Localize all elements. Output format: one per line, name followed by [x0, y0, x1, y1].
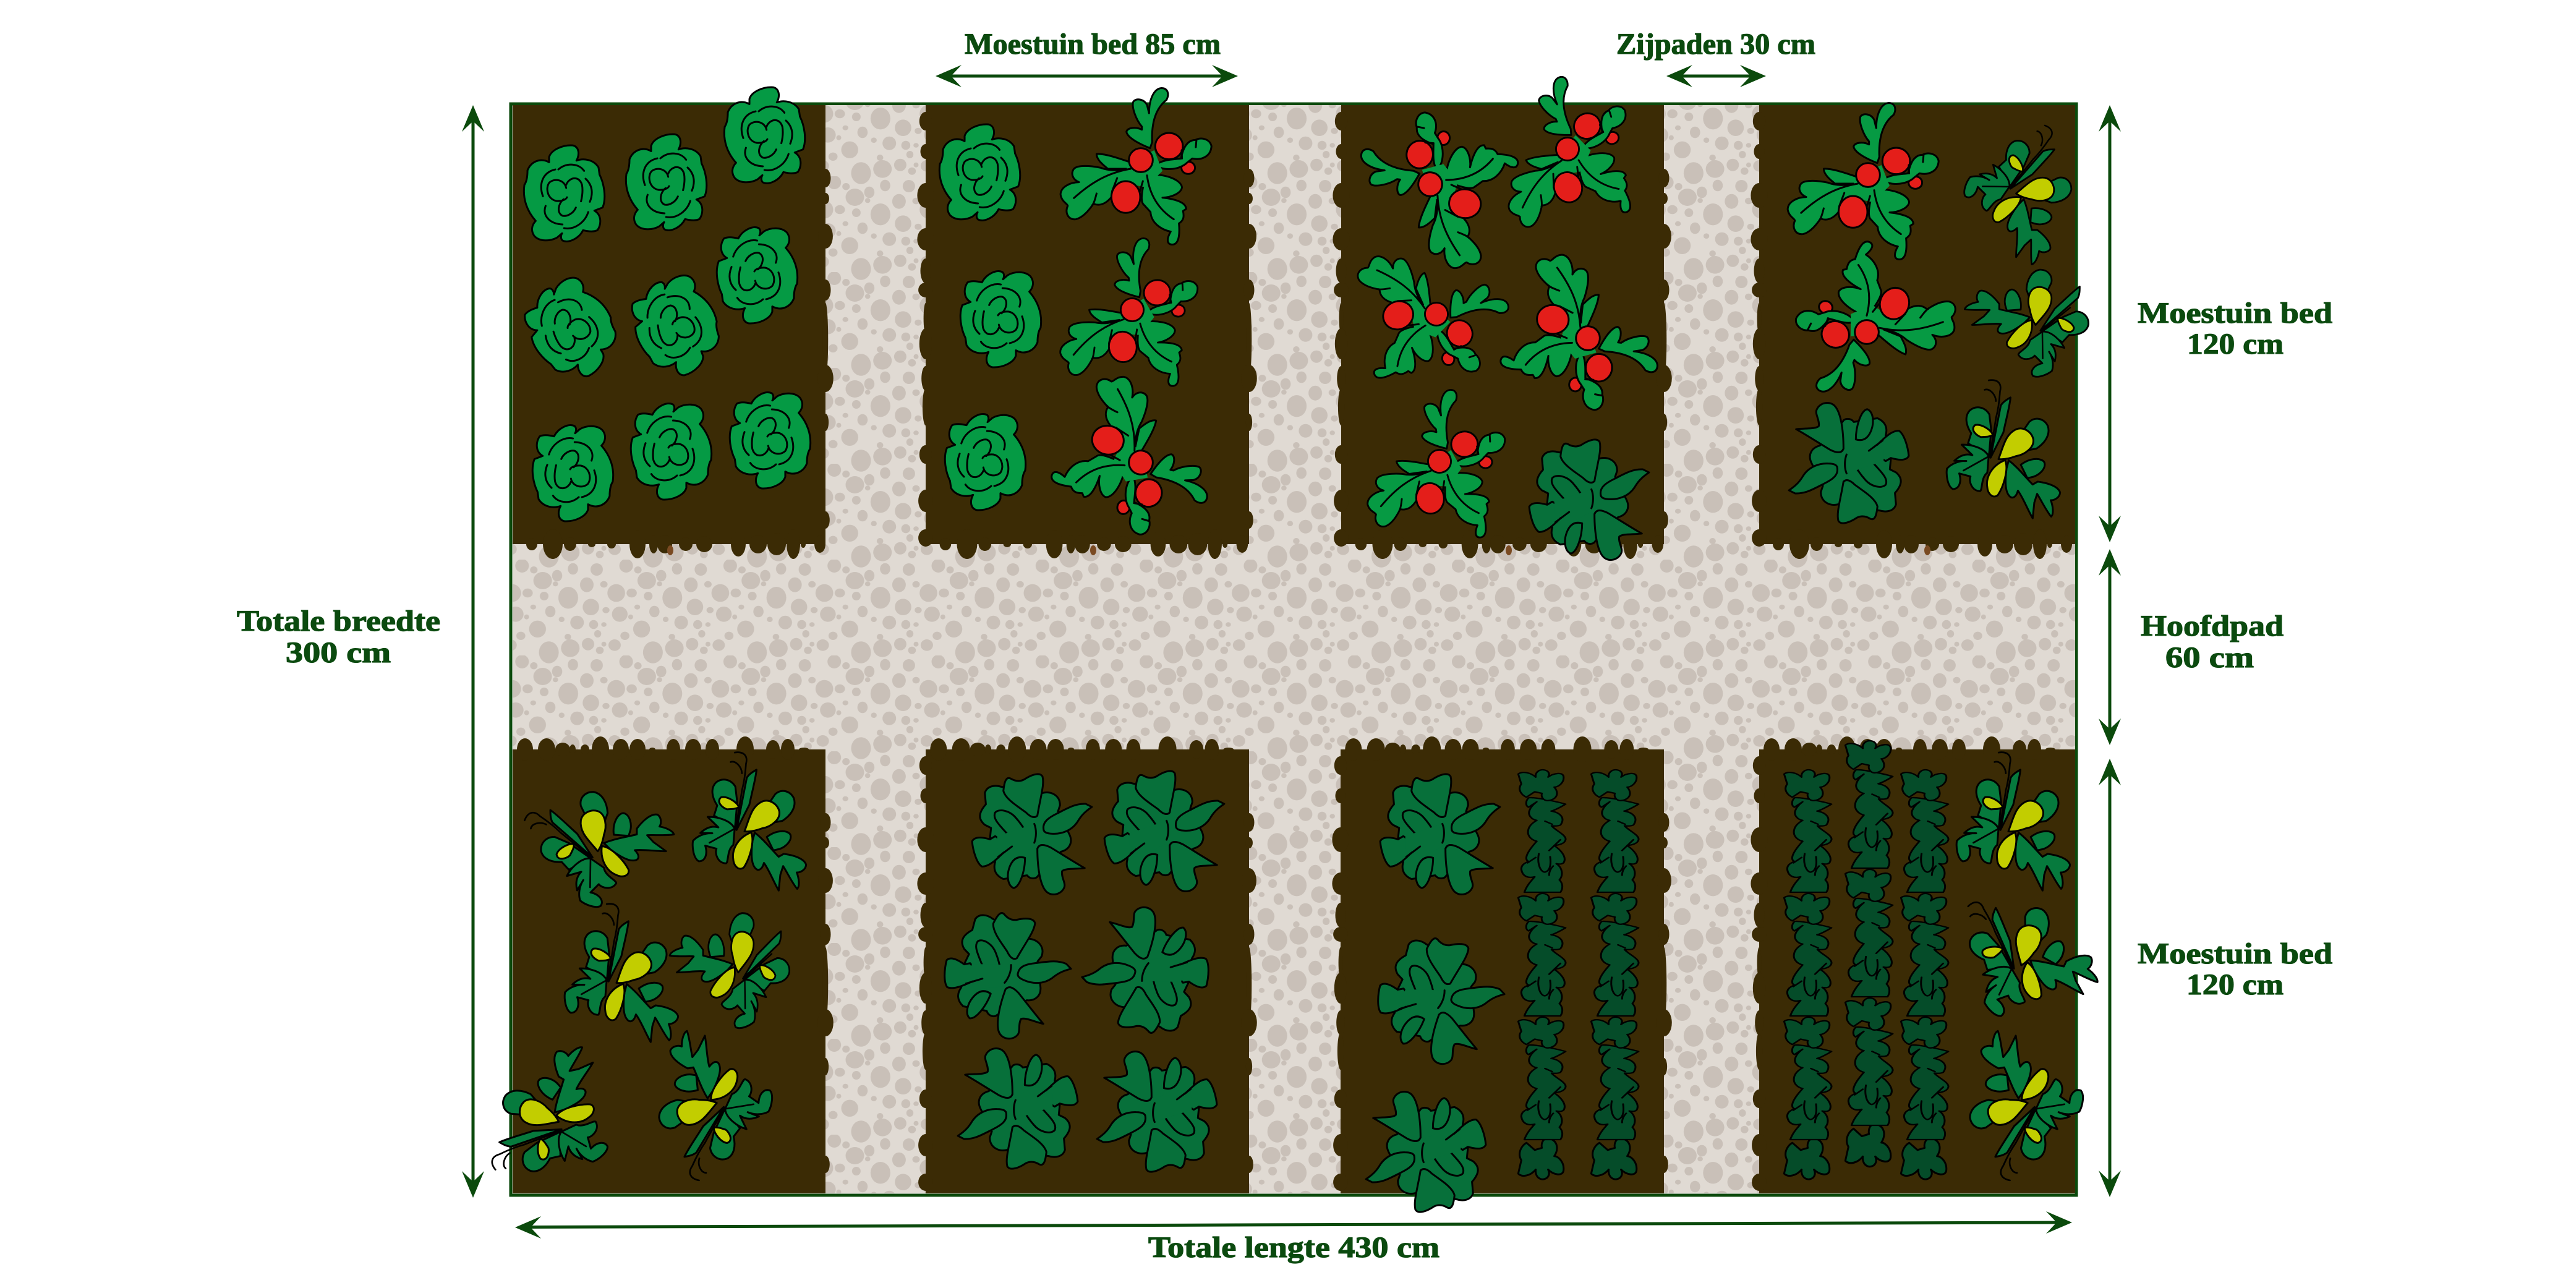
arrow: main path — [2099, 549, 2121, 745]
lettuce plant — [945, 414, 1026, 510]
label: main path: 60 cm — [2165, 641, 2254, 674]
dark leafy plant — [1529, 440, 1649, 560]
panel: bed bottom 1, squash — [471, 736, 834, 1213]
label: total width: 300 cm — [286, 636, 391, 669]
tomato plant — [1774, 228, 1973, 429]
label: total width: Totale breedte — [237, 605, 440, 638]
dark leafy plant — [958, 1049, 1078, 1169]
squash plant — [1964, 270, 2089, 377]
label: top bed height: 120 cm — [2187, 328, 2284, 360]
arrow: top bed height — [2099, 105, 2121, 542]
dark leafy plant — [1380, 774, 1500, 894]
label: top bed height: Moestuin bed — [2138, 297, 2332, 330]
squash plant — [1956, 1018, 2095, 1185]
plant row — [1518, 770, 1566, 1179]
arrow: bottom bed height — [2099, 759, 2121, 1197]
panel: bed top 3, tomato and kale — [1331, 59, 1672, 560]
gravel paths — [513, 105, 2075, 1193]
dark leafy plant — [1071, 895, 1224, 1049]
plant row — [1591, 770, 1639, 1179]
tomato plant — [1354, 383, 1518, 552]
lettuce plant — [622, 268, 731, 386]
dark leafy plant — [1366, 1092, 1486, 1212]
tomato plant — [1349, 105, 1522, 275]
squash plant — [524, 792, 674, 907]
squash plant — [645, 1018, 784, 1185]
arrow: total width — [462, 105, 484, 1198]
squash plant — [1932, 881, 2115, 1048]
dark leafy plant — [1104, 771, 1224, 891]
label: bottom bed height: Moestuin bed — [2138, 937, 2332, 970]
squash plant — [660, 738, 834, 925]
label: total length: Totale lengte 430 cm — [1148, 1231, 1439, 1264]
tomato plant — [1060, 88, 1211, 245]
squash plant — [670, 913, 790, 1028]
lettuce plant — [717, 228, 798, 323]
lettuce plant — [631, 404, 712, 500]
panel: bed bottom 3, kale and leek rows — [1332, 736, 1672, 1212]
lettuce plant — [960, 271, 1041, 367]
tomato plant — [1331, 215, 1527, 409]
label: top bed height — [2138, 297, 2332, 360]
arrow: total length — [515, 1211, 2072, 1239]
tomato plant — [1496, 250, 1668, 416]
label: bottom bed height — [2138, 937, 2332, 1001]
squash plant — [1964, 126, 2071, 265]
tomato plant — [1788, 103, 1938, 260]
lettuce plant — [524, 145, 605, 241]
squash plant — [1914, 366, 2088, 553]
lettuce plant — [724, 87, 805, 183]
lettuce plant — [532, 425, 613, 521]
arrow: bed width top — [936, 65, 1238, 87]
tomato plant — [1044, 367, 1228, 547]
tomato plant — [1469, 59, 1661, 254]
squash plant — [471, 1026, 645, 1213]
panel: bed top 2, lettuce and tomato — [917, 88, 1257, 559]
dark leafy plant — [972, 774, 1092, 894]
panel: bed bottom 4, leek rows and squash — [1751, 736, 2115, 1193]
panel: bed bottom 2, kale — [917, 736, 1257, 1193]
dark leafy plant — [1789, 403, 1909, 523]
label: main path — [2141, 610, 2284, 674]
dark leafy plant — [1097, 1052, 1217, 1172]
squash plant — [1924, 738, 2098, 925]
plant row — [1901, 770, 1948, 1179]
label: main path: Hoofdpad — [2141, 610, 2284, 642]
label: side path: Zijpaden 30 cm — [1616, 28, 1815, 61]
label: total width — [237, 605, 440, 669]
arrow: side path width — [1666, 65, 1766, 87]
dark leafy plant — [929, 897, 1082, 1051]
lettuce plant — [939, 124, 1020, 220]
panel: bed top 4, tomato, kale and squash — [1751, 103, 2089, 559]
lettuce plant — [626, 134, 707, 230]
plant row — [1784, 770, 1832, 1179]
label: bottom bed height: 120 cm — [2186, 968, 2284, 1001]
tomato plant — [1046, 232, 1211, 401]
squash plant — [532, 890, 706, 1077]
plant row — [1845, 741, 1893, 1167]
lettuce plant — [513, 268, 631, 392]
label: bed width: Moestuin bed 85 cm — [965, 28, 1221, 61]
garden frame — [511, 104, 2076, 1195]
panel: bed top 1, lettuce — [513, 87, 834, 559]
lettuce plant — [730, 393, 811, 488]
dark leafy plant — [1362, 923, 1516, 1077]
